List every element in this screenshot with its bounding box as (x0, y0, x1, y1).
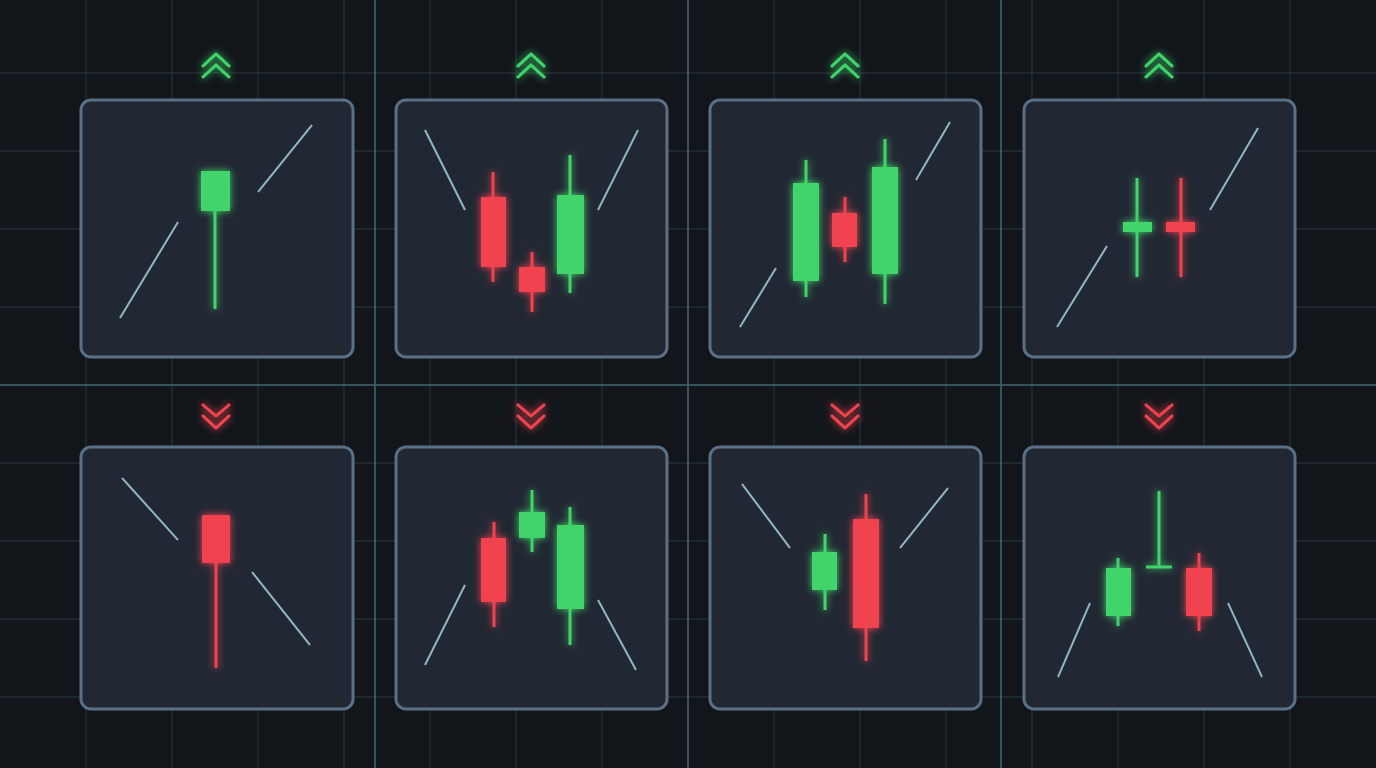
candles (481, 490, 584, 645)
panel 7: bearish engulfing (710, 447, 981, 709)
panel 6: three candles (396, 447, 667, 709)
panel 1: bullish hammer (81, 100, 353, 357)
panel 5: bearish hanging candle (81, 447, 353, 709)
candles (793, 139, 898, 304)
candles (1106, 491, 1212, 631)
candle (201, 171, 230, 309)
panel 8: evening doji star (1024, 447, 1295, 709)
candle (202, 515, 230, 668)
candles (812, 494, 879, 661)
panel 2: morning star (396, 100, 667, 357)
panel 4: doji pair (1024, 100, 1295, 357)
icons: down chevrons (203, 405, 1172, 428)
icons: up chevrons (203, 54, 1172, 77)
panel 3: bullish harami continuation (710, 100, 981, 357)
candles (1123, 178, 1195, 277)
candles (481, 155, 584, 312)
